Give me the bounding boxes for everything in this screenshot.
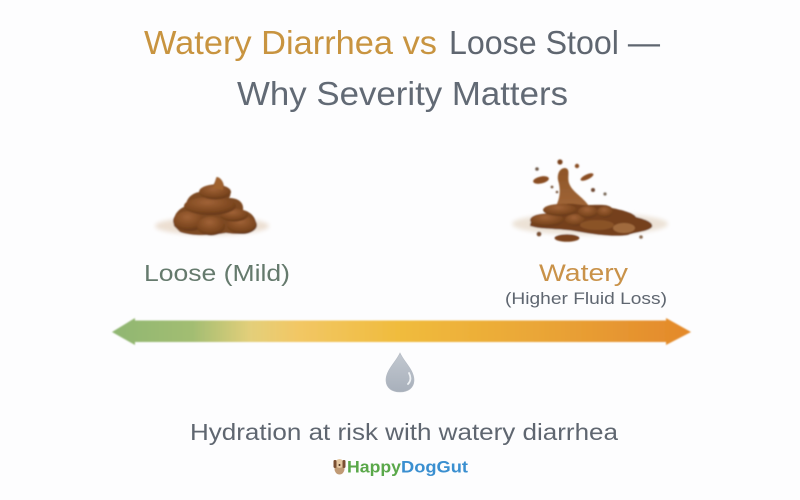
severity arrow: [112, 318, 691, 345]
label: loose (mild): Loose (Mild): [144, 260, 290, 286]
icon: watery stool splash: [512, 159, 668, 242]
title: Watery Diarrhea vs: [144, 24, 437, 61]
label: watery: Watery: [539, 260, 628, 287]
title: Why Severity Matters: [237, 75, 568, 112]
caption: hydration: Hydration at risk with watery diarrhea: [190, 419, 618, 445]
icon: loose stool pile: [155, 177, 269, 236]
title: Loose Stool —: [449, 24, 660, 61]
logo: HappyDogGut: [334, 458, 469, 476]
logo: HappyDogGut: DogGut: [401, 458, 469, 476]
logo: HappyDogGut: Happy: [347, 458, 402, 476]
label: higher fluid loss: (Higher Fluid Loss): [505, 289, 667, 308]
icon: water drop: [386, 353, 414, 392]
icon: dog: [334, 459, 346, 474]
title: [144, 24, 660, 112]
